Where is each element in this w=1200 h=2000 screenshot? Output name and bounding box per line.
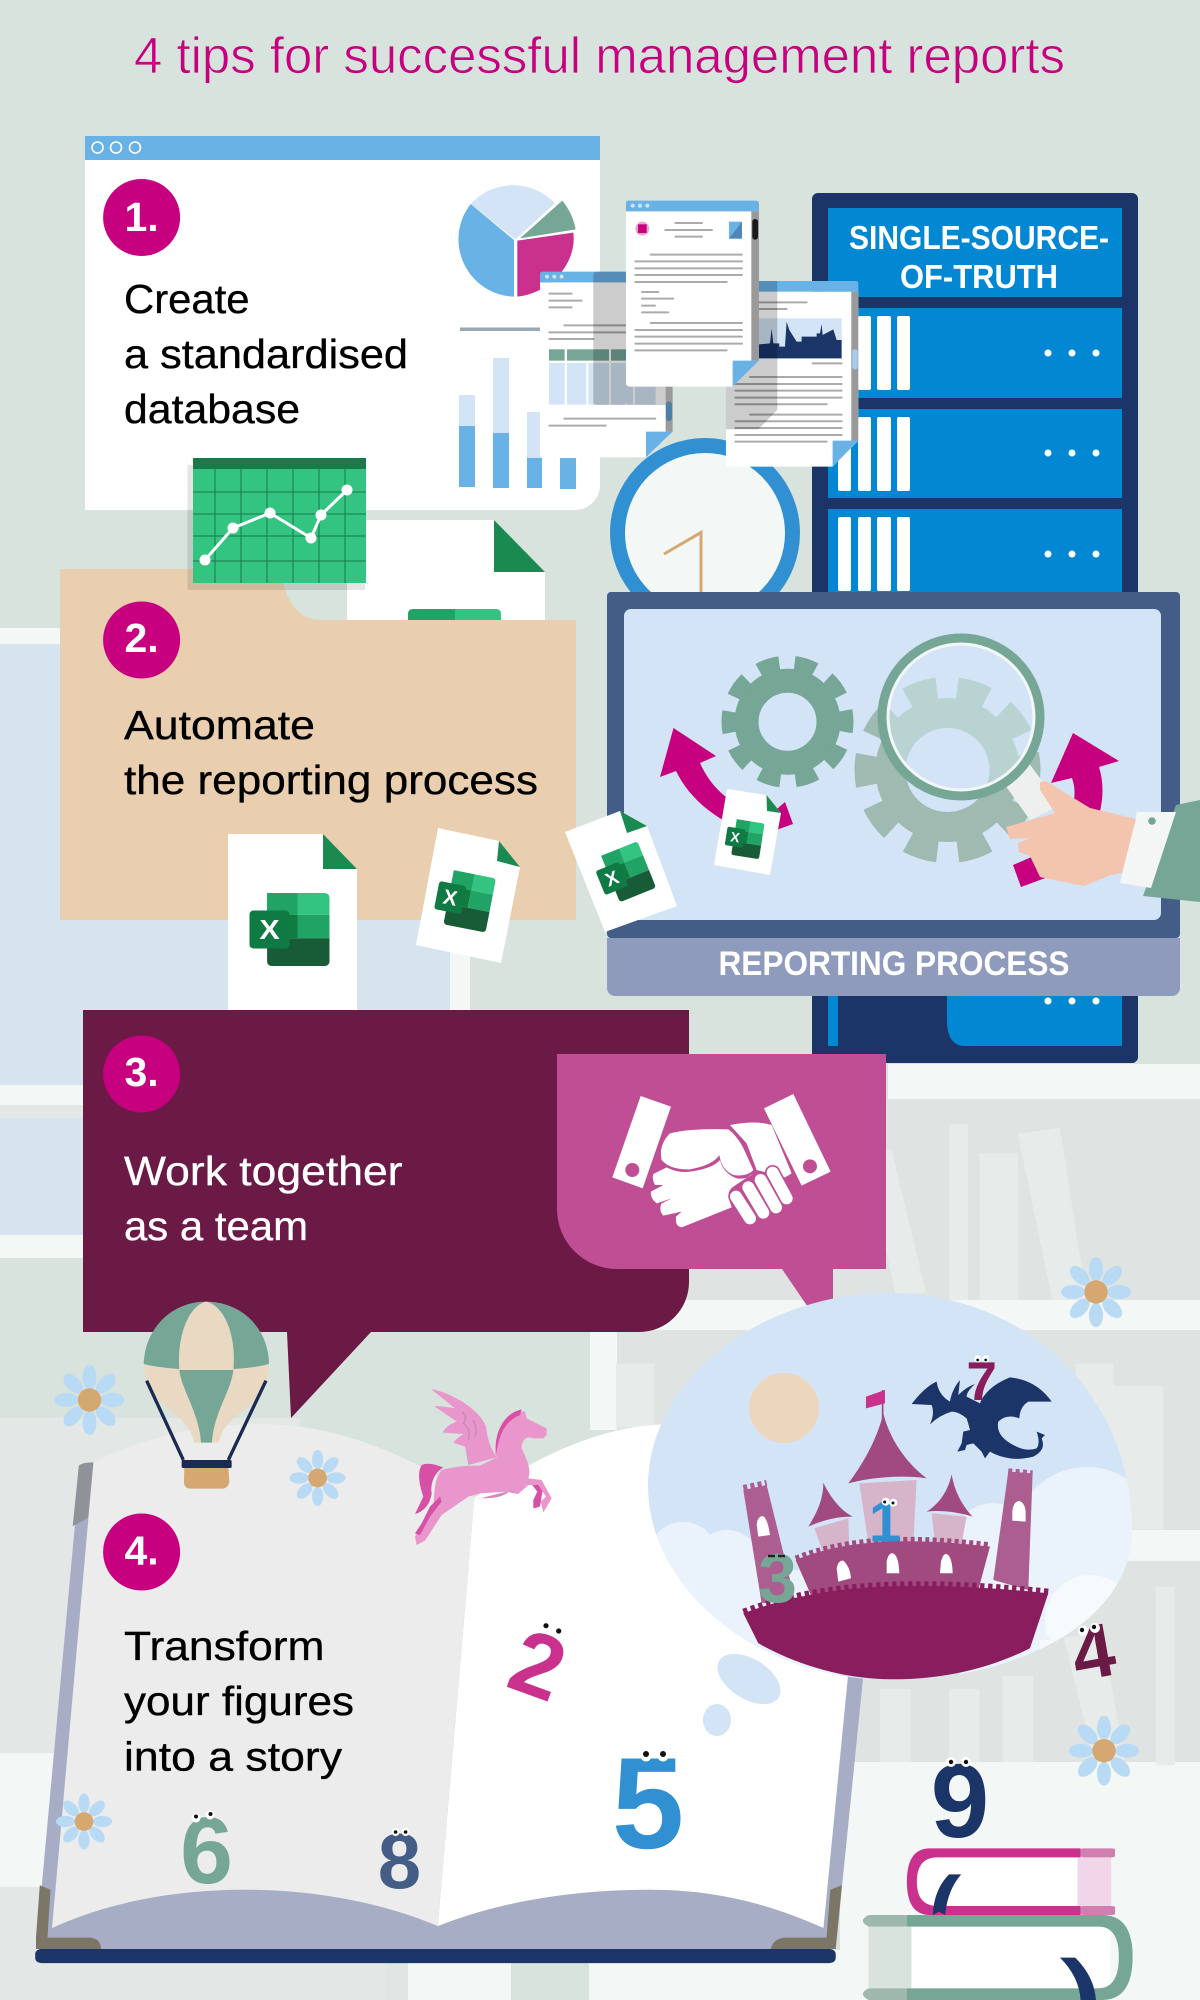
title: 4 tips for successful management reports bbox=[134, 27, 1065, 84]
hand holding magnifier bbox=[1006, 782, 1200, 902]
small tower left bbox=[808, 1483, 853, 1553]
icon: magnifying glass bbox=[878, 634, 1052, 820]
castle hill bbox=[743, 1584, 1048, 1679]
castle wall bbox=[796, 1540, 990, 1597]
number 1: 1 bbox=[869, 1490, 901, 1554]
flag bbox=[866, 1390, 885, 1420]
corner right bbox=[771, 1885, 842, 1949]
book cover bbox=[36, 1462, 863, 1949]
step 2 text: the reporting process bbox=[124, 757, 538, 803]
pink speech bubble bbox=[557, 1054, 886, 1310]
server label bbox=[828, 208, 1122, 297]
panel: reporting process monitor bbox=[607, 592, 1180, 996]
small tower right bbox=[927, 1474, 973, 1543]
step 4 text: into a story bbox=[124, 1734, 343, 1780]
number 9: 9 bbox=[931, 1743, 989, 1860]
document: table report bbox=[540, 272, 673, 457]
pie chart bbox=[458, 185, 576, 297]
number 7: 7 bbox=[966, 1350, 997, 1412]
bar chart bbox=[459, 328, 576, 489]
panel 1: standardised database window bbox=[85, 136, 600, 510]
number 6: 6 bbox=[180, 1798, 233, 1904]
server label: OF-TRUTH bbox=[900, 258, 1058, 295]
pink book bbox=[907, 1848, 1115, 1915]
right page bbox=[438, 1424, 848, 1928]
step 4 text: your figures bbox=[124, 1678, 354, 1724]
label strip: REPORTING PROCESS bbox=[718, 945, 1070, 983]
excel file 2 bbox=[416, 828, 520, 963]
book base bbox=[35, 1949, 836, 1963]
step 4 text: Transform bbox=[124, 1623, 324, 1669]
green spreadsheet with line chart bbox=[188, 458, 366, 590]
number 2: 2 bbox=[497, 1610, 578, 1721]
step 1 text: a standardised bbox=[124, 331, 408, 377]
thought bubble with castle bbox=[640, 1293, 1160, 1736]
panel: server rack single source of truth bbox=[812, 193, 1138, 1063]
server rows bbox=[828, 308, 1122, 1046]
panel 2: automate folder bbox=[60, 458, 576, 920]
excel file 3 bbox=[565, 811, 677, 932]
step 1 text: Create bbox=[124, 276, 250, 322]
magenta arrow left bbox=[660, 728, 793, 838]
excel file small bbox=[714, 789, 781, 875]
folder bbox=[60, 569, 576, 920]
step 1 badge: 1. bbox=[124, 194, 159, 240]
icon: handshake bbox=[612, 1094, 831, 1227]
report documents bbox=[540, 201, 858, 467]
document: chart report bbox=[726, 281, 858, 467]
gear small bbox=[730, 664, 846, 780]
thought bubbles bbox=[703, 1643, 789, 1736]
number characters bbox=[180, 1350, 1122, 1905]
step 1 badge bbox=[103, 179, 180, 256]
clouds bbox=[656, 1467, 1132, 1676]
number 4: 4 bbox=[1065, 1607, 1122, 1698]
teal book bbox=[863, 1915, 1133, 2000]
step 3 badge: 3. bbox=[124, 1049, 159, 1095]
panel 4: open book bbox=[35, 1424, 863, 1963]
stack of books bbox=[863, 1848, 1133, 2000]
server label: SINGLE-SOURCE- bbox=[849, 219, 1109, 256]
step 3 badge bbox=[103, 1036, 180, 1112]
big tower right bbox=[993, 1471, 1033, 1590]
magenta arrow right bbox=[1013, 733, 1119, 887]
step 3 text: as a team bbox=[124, 1203, 308, 1249]
spine grey strip bbox=[73, 1462, 93, 1526]
document behind folder bbox=[347, 520, 545, 640]
window title bar bbox=[85, 136, 600, 160]
document: text report bbox=[626, 201, 759, 387]
icon: pegasus bbox=[415, 1389, 552, 1545]
label strip bbox=[607, 938, 1180, 996]
sun bbox=[749, 1373, 819, 1443]
number 8: 8 bbox=[378, 1817, 421, 1905]
step 2 badge: 2. bbox=[124, 615, 159, 661]
icon: dragon bbox=[912, 1377, 1052, 1459]
panel 3: work together speech bubble bbox=[83, 1010, 689, 1418]
number 5: 5 bbox=[612, 1730, 684, 1876]
page edge wave bbox=[38, 1890, 833, 1949]
icon: hot air balloon bbox=[144, 1302, 269, 1489]
castle bbox=[743, 1390, 1048, 1679]
left page bbox=[52, 1424, 474, 1928]
step 3 text: Work together bbox=[124, 1148, 402, 1194]
gear large bbox=[866, 688, 1030, 852]
main tower bbox=[848, 1413, 927, 1543]
big tower left bbox=[743, 1483, 795, 1603]
icon: clock bbox=[618, 446, 792, 620]
step 4 badge: 4. bbox=[124, 1528, 159, 1574]
corner left bbox=[36, 1885, 101, 1949]
excel file 1 bbox=[228, 834, 357, 1020]
step 4 badge bbox=[103, 1514, 180, 1590]
step 2 badge bbox=[103, 602, 180, 678]
step 2 text: Automate bbox=[124, 702, 315, 748]
step 1 text: database bbox=[124, 386, 300, 432]
number 3: 3 bbox=[758, 1539, 797, 1617]
flowers bbox=[54, 1257, 1139, 1850]
